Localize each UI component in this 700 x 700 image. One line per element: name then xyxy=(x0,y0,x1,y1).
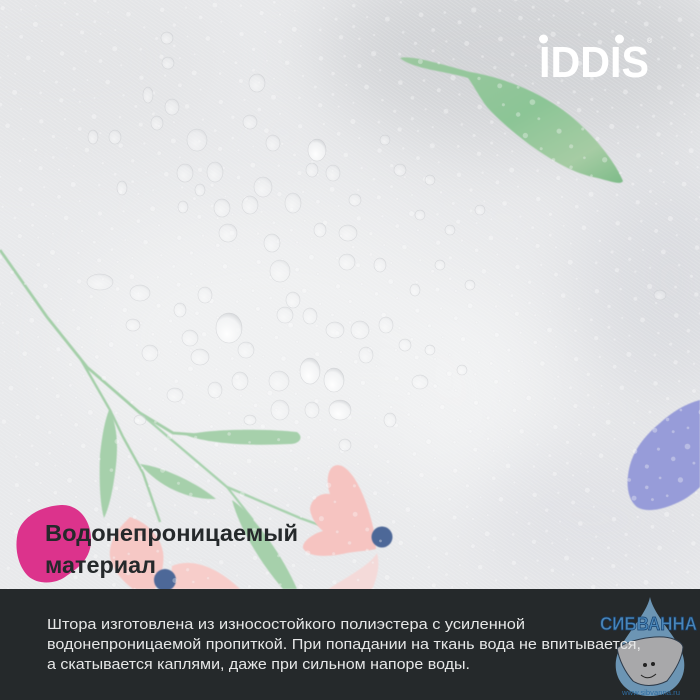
body text xyxy=(47,616,641,673)
periwinkle petal right edge xyxy=(628,400,700,510)
body text: а скатывается каплями, даже при сильном напоре воды. xyxy=(47,656,470,673)
heading: Водонепроницаемый xyxy=(45,520,298,546)
watermark: Sibvanna logo: www.sibvanna.ru xyxy=(621,690,680,697)
flower left xyxy=(110,517,163,589)
iddis logo: IDDIS xyxy=(539,39,649,87)
watermark: Sibvanna logo xyxy=(600,597,697,697)
heading xyxy=(45,520,298,578)
heading: материал xyxy=(45,552,156,578)
water droplets xyxy=(87,32,666,451)
green leaf top right xyxy=(400,57,623,183)
large bright droplets xyxy=(216,139,351,420)
watermark: Sibvanna logo: СИБВАННА xyxy=(600,614,697,634)
pink blob badge xyxy=(16,505,91,582)
iddis logo: ® xyxy=(647,37,653,45)
body text: водонепроницаемой пропиткой. При попадании на ткань вода не впитывается, xyxy=(47,636,641,653)
blue flower centres xyxy=(154,526,392,591)
dark footer band xyxy=(0,589,700,700)
pink flowers xyxy=(110,465,378,590)
body text: Штора изготовлена из износостойкого полиэстера с усиленной xyxy=(47,616,525,633)
stem and foliage lower left xyxy=(0,250,325,589)
flower right xyxy=(303,465,376,556)
